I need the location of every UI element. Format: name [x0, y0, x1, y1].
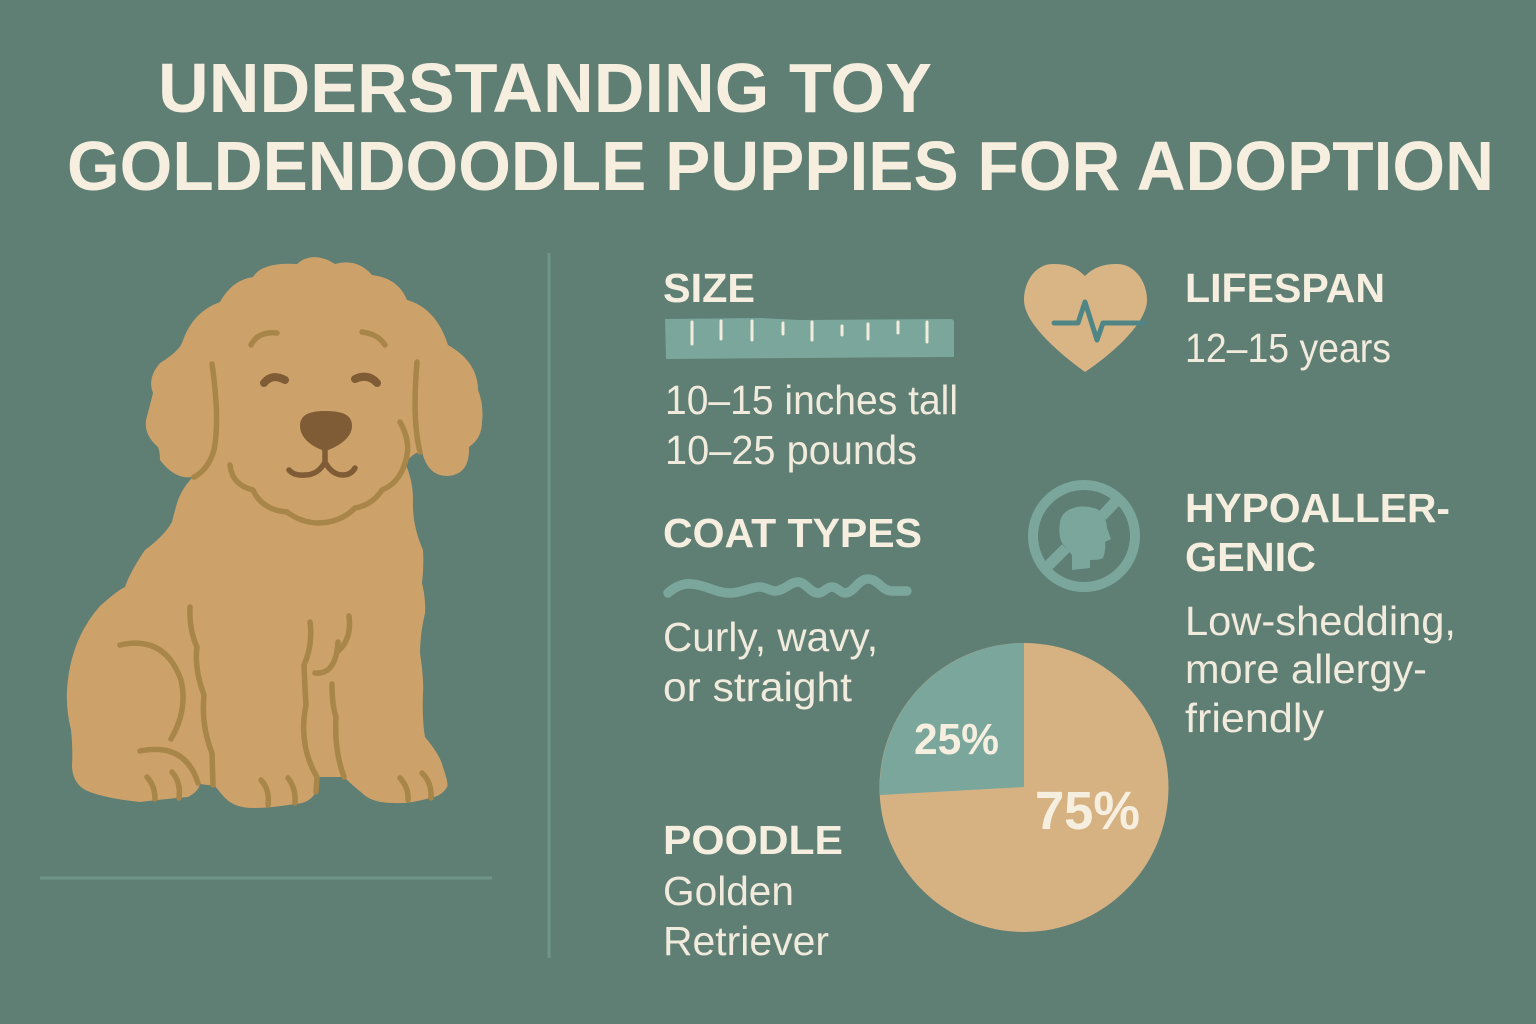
title — [67, 49, 1494, 205]
size text — [665, 377, 958, 473]
illustration: puppy — [67, 257, 482, 808]
hypoallergenic heading: HYPOALLER- — [1185, 485, 1450, 531]
hypoallergenic text: Low-shedding, — [1185, 598, 1456, 644]
puppy fur lines — [120, 332, 431, 805]
section: breed mix — [663, 643, 1168, 964]
lifespan text: 12–15 years — [1185, 325, 1391, 371]
section: size — [663, 265, 958, 473]
section: lifespan — [1024, 264, 1391, 372]
icon: ruler — [665, 318, 954, 359]
hypoallergenic heading — [1185, 485, 1450, 580]
golden retriever label: Retriever — [663, 918, 829, 964]
icon: wavy line — [668, 579, 907, 593]
size text: 10–15 inches tall — [665, 377, 958, 423]
lifespan heading: LIFESPAN — [1185, 265, 1385, 311]
section: coat types — [663, 510, 922, 710]
hypoallergenic heading: GENIC — [1185, 534, 1316, 580]
size text: 10–25 pounds — [665, 427, 917, 473]
poodle heading: POODLE — [663, 817, 843, 863]
coat types text: Curly, wavy, — [663, 614, 878, 660]
pie chart: 75% — [1035, 781, 1140, 841]
section: hypoallergenic — [1033, 485, 1456, 741]
title: GOLDENDOODLE PUPPIES FOR ADOPTION — [67, 127, 1494, 205]
hypoallergenic text: more allergy- — [1185, 646, 1427, 692]
hypoallergenic text: friendly — [1185, 695, 1325, 741]
title: UNDERSTANDING TOY — [158, 49, 932, 127]
hypoallergenic text — [1185, 598, 1456, 741]
puppy body silhouette — [67, 257, 482, 808]
size heading: SIZE — [663, 265, 755, 311]
pie chart — [880, 643, 1168, 932]
golden retriever label — [663, 868, 829, 964]
coat types heading: COAT TYPES — [663, 510, 922, 556]
golden retriever label: Golden — [663, 868, 794, 914]
coat types text: or straight — [663, 664, 852, 710]
icon: no allergy head — [1033, 485, 1135, 587]
pie chart: 25% — [914, 715, 999, 764]
puppy face — [264, 377, 377, 475]
icon: heart with pulse — [1024, 264, 1147, 372]
coat types text — [663, 614, 878, 710]
